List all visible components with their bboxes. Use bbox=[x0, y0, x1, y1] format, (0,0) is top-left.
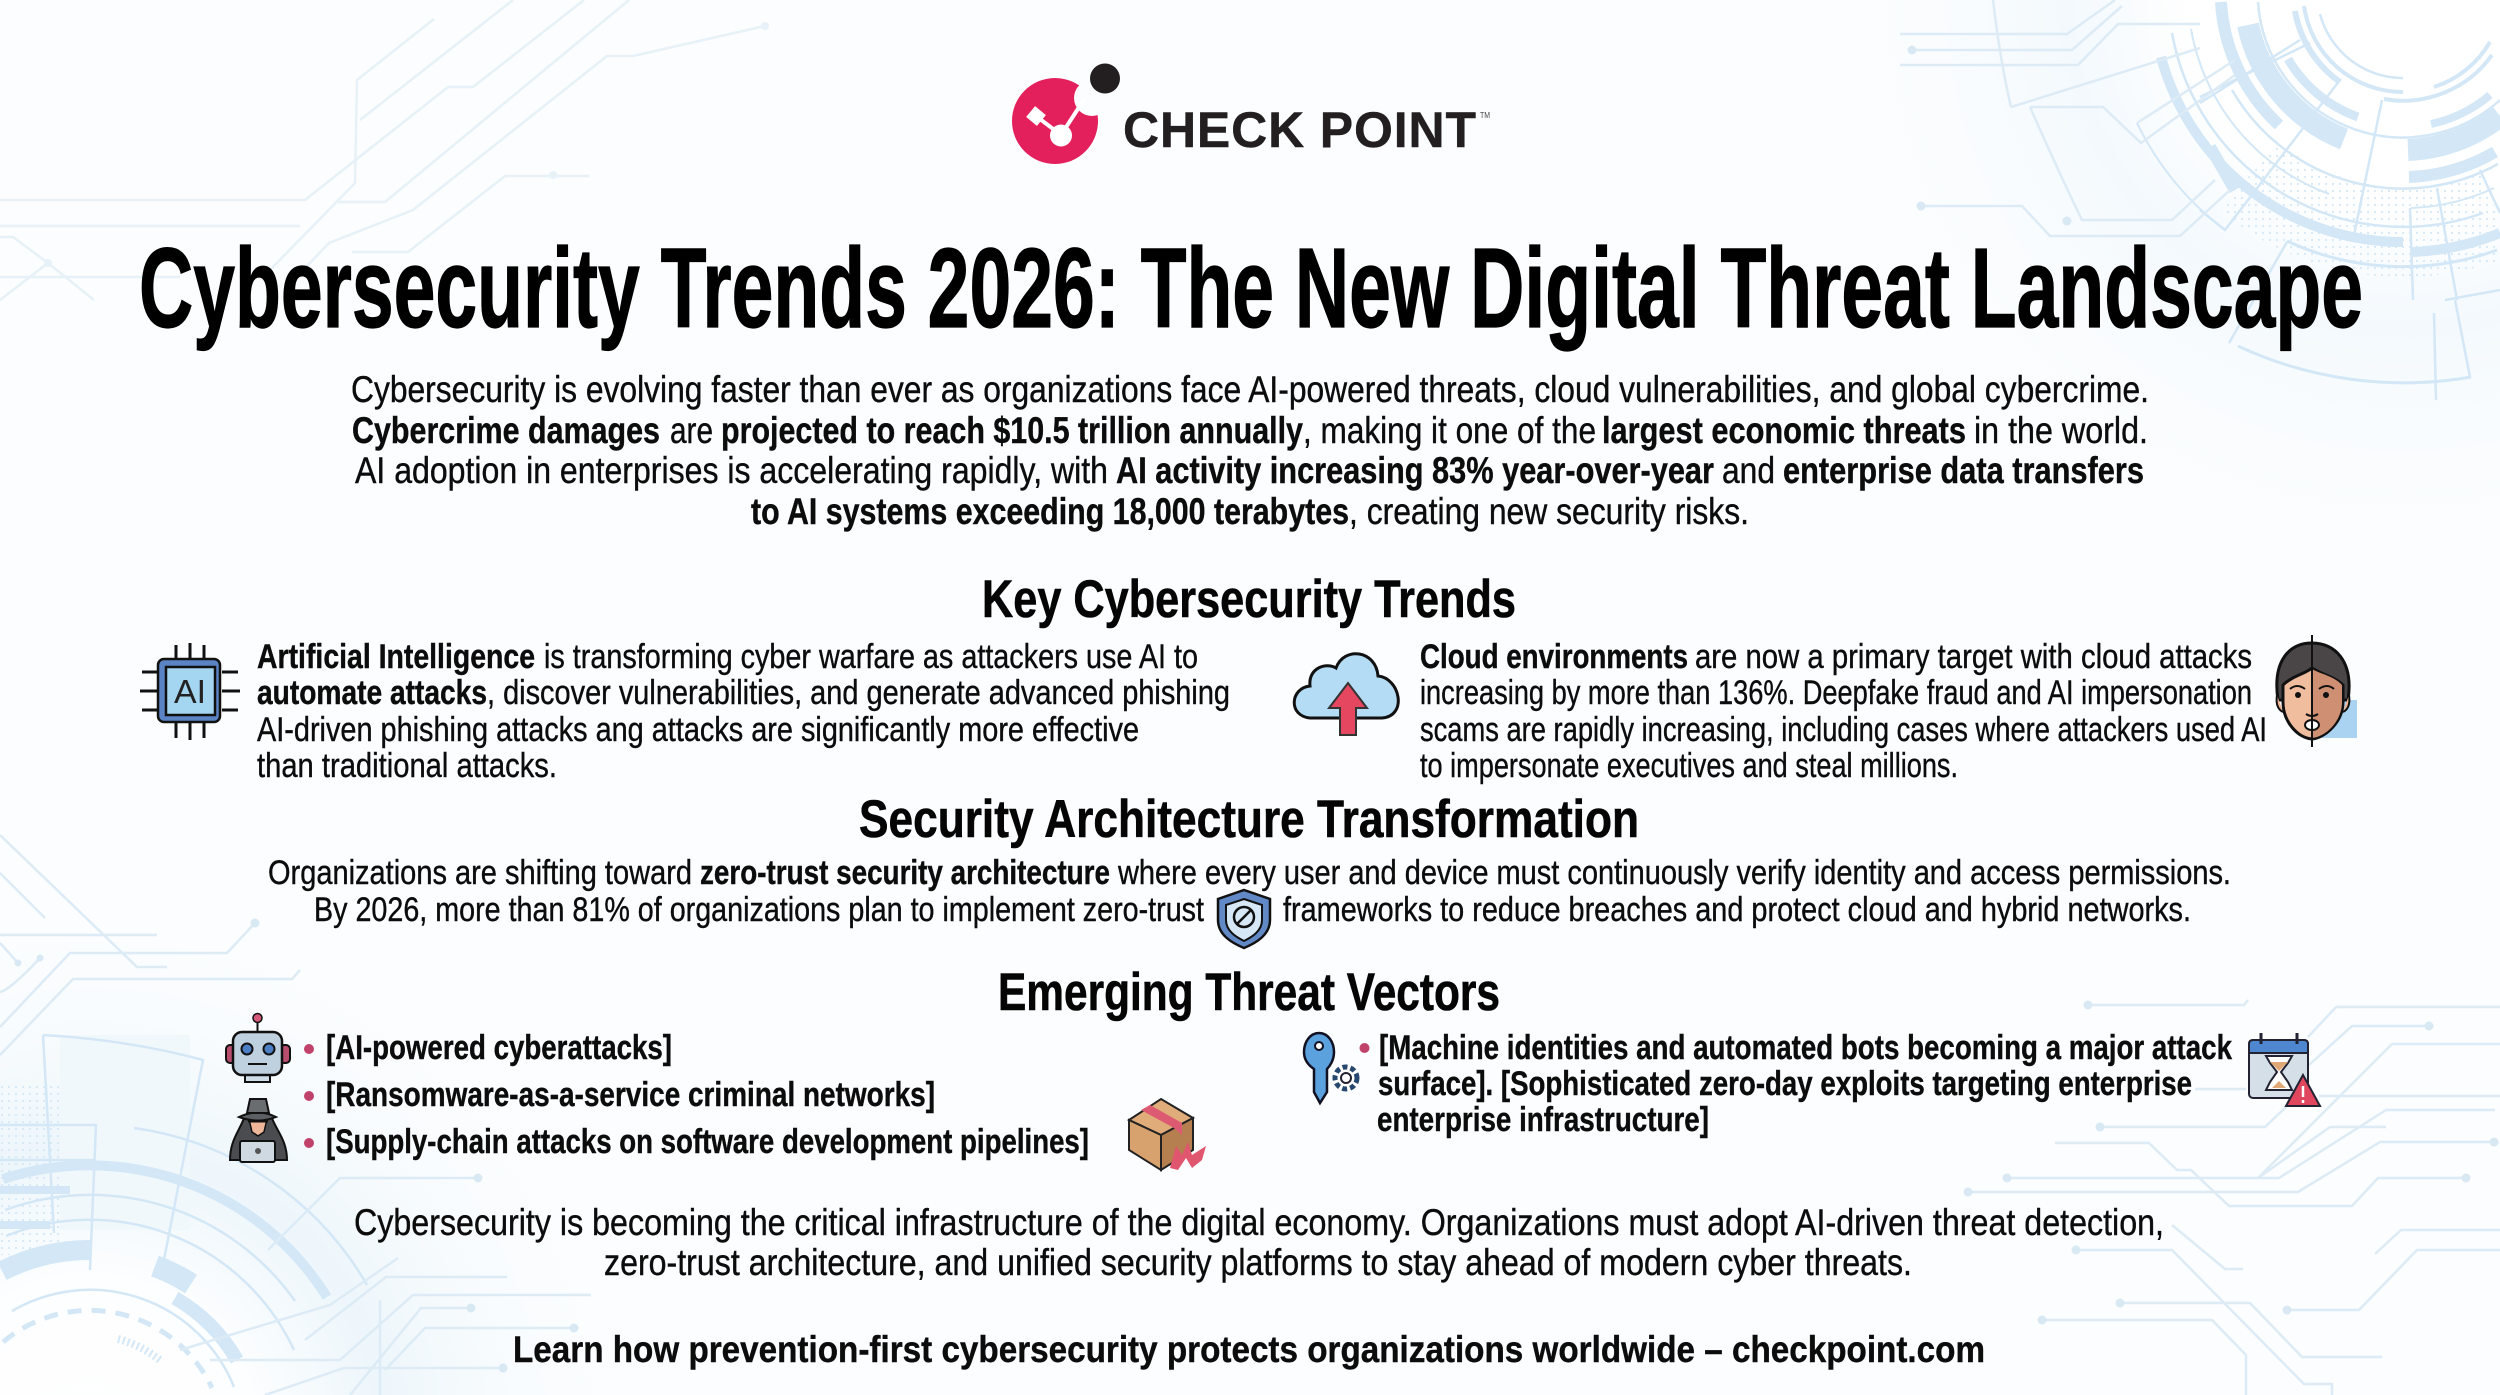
intro text block: Cybercrime damages bbox=[352, 410, 660, 451]
text: cloud environments bbox=[1420, 638, 2267, 785]
intro text block: , creating new security risks. bbox=[1349, 491, 1749, 532]
icon: hacker bbox=[230, 1099, 287, 1162]
intro text block: to AI systems exceeding 18,000 terabytes bbox=[751, 491, 1349, 532]
icon: calendar hourglass bbox=[2249, 1033, 2320, 1106]
logo: Check Point: TM bbox=[1480, 111, 1490, 120]
text: zero trust bbox=[268, 854, 2231, 929]
intro text block: enterprise data transfers bbox=[1783, 450, 2144, 491]
bullets: threat list: [AI-powered cyberattacks] bbox=[326, 1029, 672, 1067]
text: cloud environments: are now a primary target with cloud attacks bbox=[1695, 638, 2252, 676]
text: artificial intelligence: than traditional attacks. bbox=[257, 747, 557, 785]
intro text block: in the world. bbox=[1974, 410, 2148, 451]
text: zero trust: Organizations are shifting toward bbox=[268, 854, 692, 892]
text: cloud environments: Cloud environments bbox=[1420, 638, 1688, 676]
intro text block: projected to reach $10.5 trillion annually bbox=[721, 410, 1303, 451]
intro text block: Cybersecurity is evolving faster than ever as organizations face AI-powered threats, cloud vulnerabilities, and global cybercrime. bbox=[351, 369, 2149, 410]
bullets: machine identities: enterprise infrastructure] bbox=[1377, 1101, 1709, 1139]
text: zero trust: frameworks to reduce breaches and protect cloud and hybrid networks. bbox=[1283, 891, 2191, 929]
text: cloud environments: scams are rapidly increasing, including cases where attackers used AI bbox=[1420, 711, 2267, 749]
icon: damaged box bbox=[1129, 1099, 1206, 1170]
heading: security architecture: Security Architecture Transformation bbox=[859, 790, 1639, 849]
icon: key and gear bbox=[1304, 1033, 1357, 1103]
logo: Check Point bbox=[1012, 64, 1490, 164]
bullets: machine identities bbox=[1360, 1029, 2232, 1139]
intro text block: AI adoption in enterprises is accelerating rapidly, with bbox=[355, 450, 1108, 491]
text: artificial intelligence: is transforming cyber warfare as attackers use AI to bbox=[544, 638, 1198, 676]
heading: emerging threats: Emerging Threat Vectors bbox=[998, 963, 1500, 1022]
text: artificial intelligence: automate attacks bbox=[257, 674, 487, 712]
bullets: threat list: [Supply-chain attacks on software development pipelines] bbox=[326, 1123, 1089, 1161]
text: artificial intelligence bbox=[257, 638, 1230, 785]
intro text block: are bbox=[670, 410, 713, 451]
intro text block: , making it one of the bbox=[1303, 410, 1596, 451]
text: artificial intelligence: , discover vulnerabilities, and generate advanced phishing bbox=[487, 674, 1230, 712]
intro text block bbox=[351, 369, 2149, 532]
closing text bbox=[354, 1202, 2164, 1283]
intro text block: and bbox=[1722, 450, 1775, 491]
bullets: threat list: [Ransomware-as-a-service criminal networks] bbox=[326, 1076, 935, 1114]
call to action: Learn how prevention-first cybersecurity protects organizations worldwide – checkpoint.com bbox=[513, 1329, 1985, 1370]
bullets: machine identities: surface]. [Sophisticated zero-day exploits targeting enterprise bbox=[1378, 1065, 2192, 1103]
text: cloud environments: increasing by more than 136%. Deepfake fraud and AI impersonation bbox=[1420, 674, 2252, 712]
icon: shield bbox=[1218, 890, 1270, 948]
text: zero trust: By 2026, more than 81% of organizations plan to implement zero-trust bbox=[314, 891, 1204, 929]
icon: AI chip: AI bbox=[174, 673, 206, 710]
icon: cloud upload bbox=[1294, 654, 1398, 735]
logo: Check Point: CHECK POINT bbox=[1123, 102, 1476, 158]
heading: key trends: Key Cybersecurity Trends bbox=[982, 570, 1516, 629]
closing text: Cybersecurity is becoming the critical infrastructure of the digital economy. Organizations must adopt AI-driven threat detection, bbox=[354, 1202, 2164, 1243]
text: artificial intelligence: Artificial Intelligence bbox=[257, 638, 535, 676]
text: cloud environments: to impersonate executives and steal millions. bbox=[1420, 747, 1958, 785]
icon: deepfake face bbox=[2277, 635, 2357, 747]
text: zero trust: zero-trust security architecture bbox=[700, 854, 1110, 892]
text: zero trust: where every user and device must continuously verify identity and access permissions. bbox=[1117, 854, 2231, 892]
icon: robot bbox=[226, 1014, 290, 1082]
bullets: threat list bbox=[304, 1029, 1089, 1161]
closing text: zero-trust architecture, and unified security platforms to stay ahead of modern cyber threats. bbox=[604, 1242, 1912, 1283]
icon: AI chip bbox=[140, 643, 240, 740]
intro text block: largest economic threats bbox=[1602, 410, 1966, 451]
intro text block: AI activity increasing 83% year-over-year bbox=[1116, 450, 1714, 491]
text: artificial intelligence: AI-driven phishing attacks ang attacks are significantly more effective bbox=[257, 711, 1139, 749]
bullets: machine identities: [Machine identities and automated bots becoming a major attack bbox=[1379, 1029, 2232, 1067]
